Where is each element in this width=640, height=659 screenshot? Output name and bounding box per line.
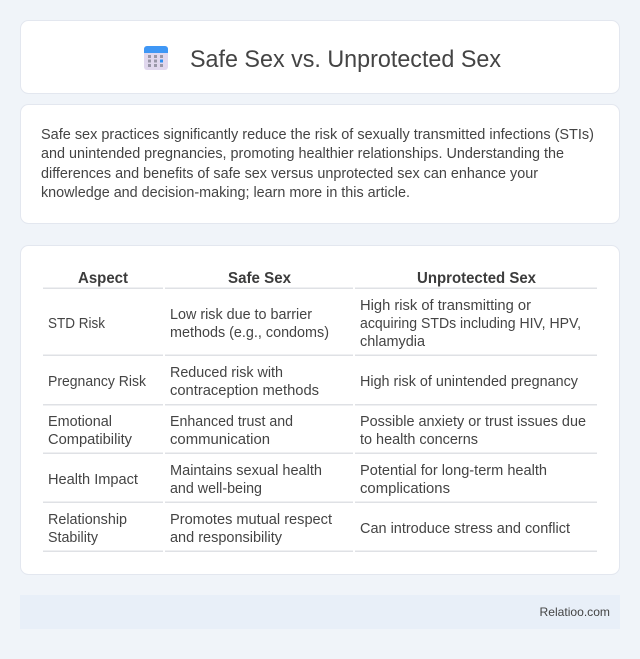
panel: comparison table — [20, 246, 620, 574]
row: pregnancy risk: Reduced risk with — [170, 365, 283, 381]
panel: title header — [20, 20, 620, 94]
title: Safe Sex vs. Unprotected Sex — [190, 46, 501, 73]
row: emotional compatibility: Emotional — [48, 414, 112, 430]
row: health impact: Maintains sexual health — [170, 463, 322, 479]
text block: intro paragraph: and unintended pregnancies, promoting healthier relationships. Understanding the — [41, 146, 564, 162]
row: STD risk — [48, 298, 581, 350]
text block: intro paragraph: differences and benefits of safe sex versus unprotected sex can enhance your — [41, 166, 538, 182]
row: emotional compatibility: Possible anxiety or trust issues due — [360, 414, 586, 430]
row: relationship stability: and responsibility — [170, 530, 283, 546]
row: STD risk: Low risk due to barrier — [170, 307, 312, 323]
row: pregnancy risk — [48, 365, 579, 399]
footer — [20, 595, 620, 629]
text block: intro paragraph: knowledge and decision-making; learn more in this article. — [41, 185, 410, 201]
row: emotional compatibility: Compatibility — [48, 432, 133, 448]
table header row: Safe Sex — [228, 270, 291, 287]
row: STD risk: chlamydia — [360, 334, 425, 350]
row: pregnancy risk: Pregnancy Risk — [48, 374, 147, 390]
row: health impact: complications — [360, 481, 450, 497]
text block: intro paragraph: Safe sex practices significantly reduce the risk of sexually transmitted infections (STIs) — [41, 127, 594, 143]
row: health impact: and well-being — [170, 481, 262, 497]
panel: introduction — [20, 104, 620, 224]
row: STD risk: High risk of transmitting or — [360, 298, 531, 314]
row: relationship stability: Relationship — [48, 512, 127, 528]
row: relationship stability: Stability — [48, 530, 99, 546]
row: pregnancy risk: High risk of unintended pregnancy — [360, 374, 579, 390]
text block: intro paragraph — [41, 127, 594, 201]
row: emotional compatibility: communication — [170, 432, 270, 448]
row: emotional compatibility: Enhanced trust and — [170, 414, 293, 430]
row: health impact: Potential for long-term health — [360, 463, 547, 479]
row: relationship stability — [48, 512, 570, 546]
row: relationship stability: Promotes mutual respect — [170, 512, 332, 528]
row: STD risk: acquiring STDs including HIV, HPV, — [360, 316, 581, 332]
row: emotional compatibility: to health concerns — [360, 432, 478, 448]
row: relationship stability: Can introduce stress and conflict — [360, 521, 570, 537]
row: health impact: Health Impact — [48, 472, 138, 488]
row: STD risk: STD Risk — [48, 316, 106, 332]
row: emotional compatibility — [48, 414, 586, 448]
icon: calendar — [144, 46, 168, 70]
row: health impact — [48, 463, 547, 497]
table header row — [78, 270, 536, 287]
row: STD risk: methods (e.g., condoms) — [170, 325, 329, 341]
footer: Relatioo.com — [540, 605, 610, 619]
table header row: Aspect — [78, 270, 129, 287]
table header row: Unprotected Sex — [417, 270, 536, 287]
row: pregnancy risk: contraception methods — [170, 383, 319, 399]
